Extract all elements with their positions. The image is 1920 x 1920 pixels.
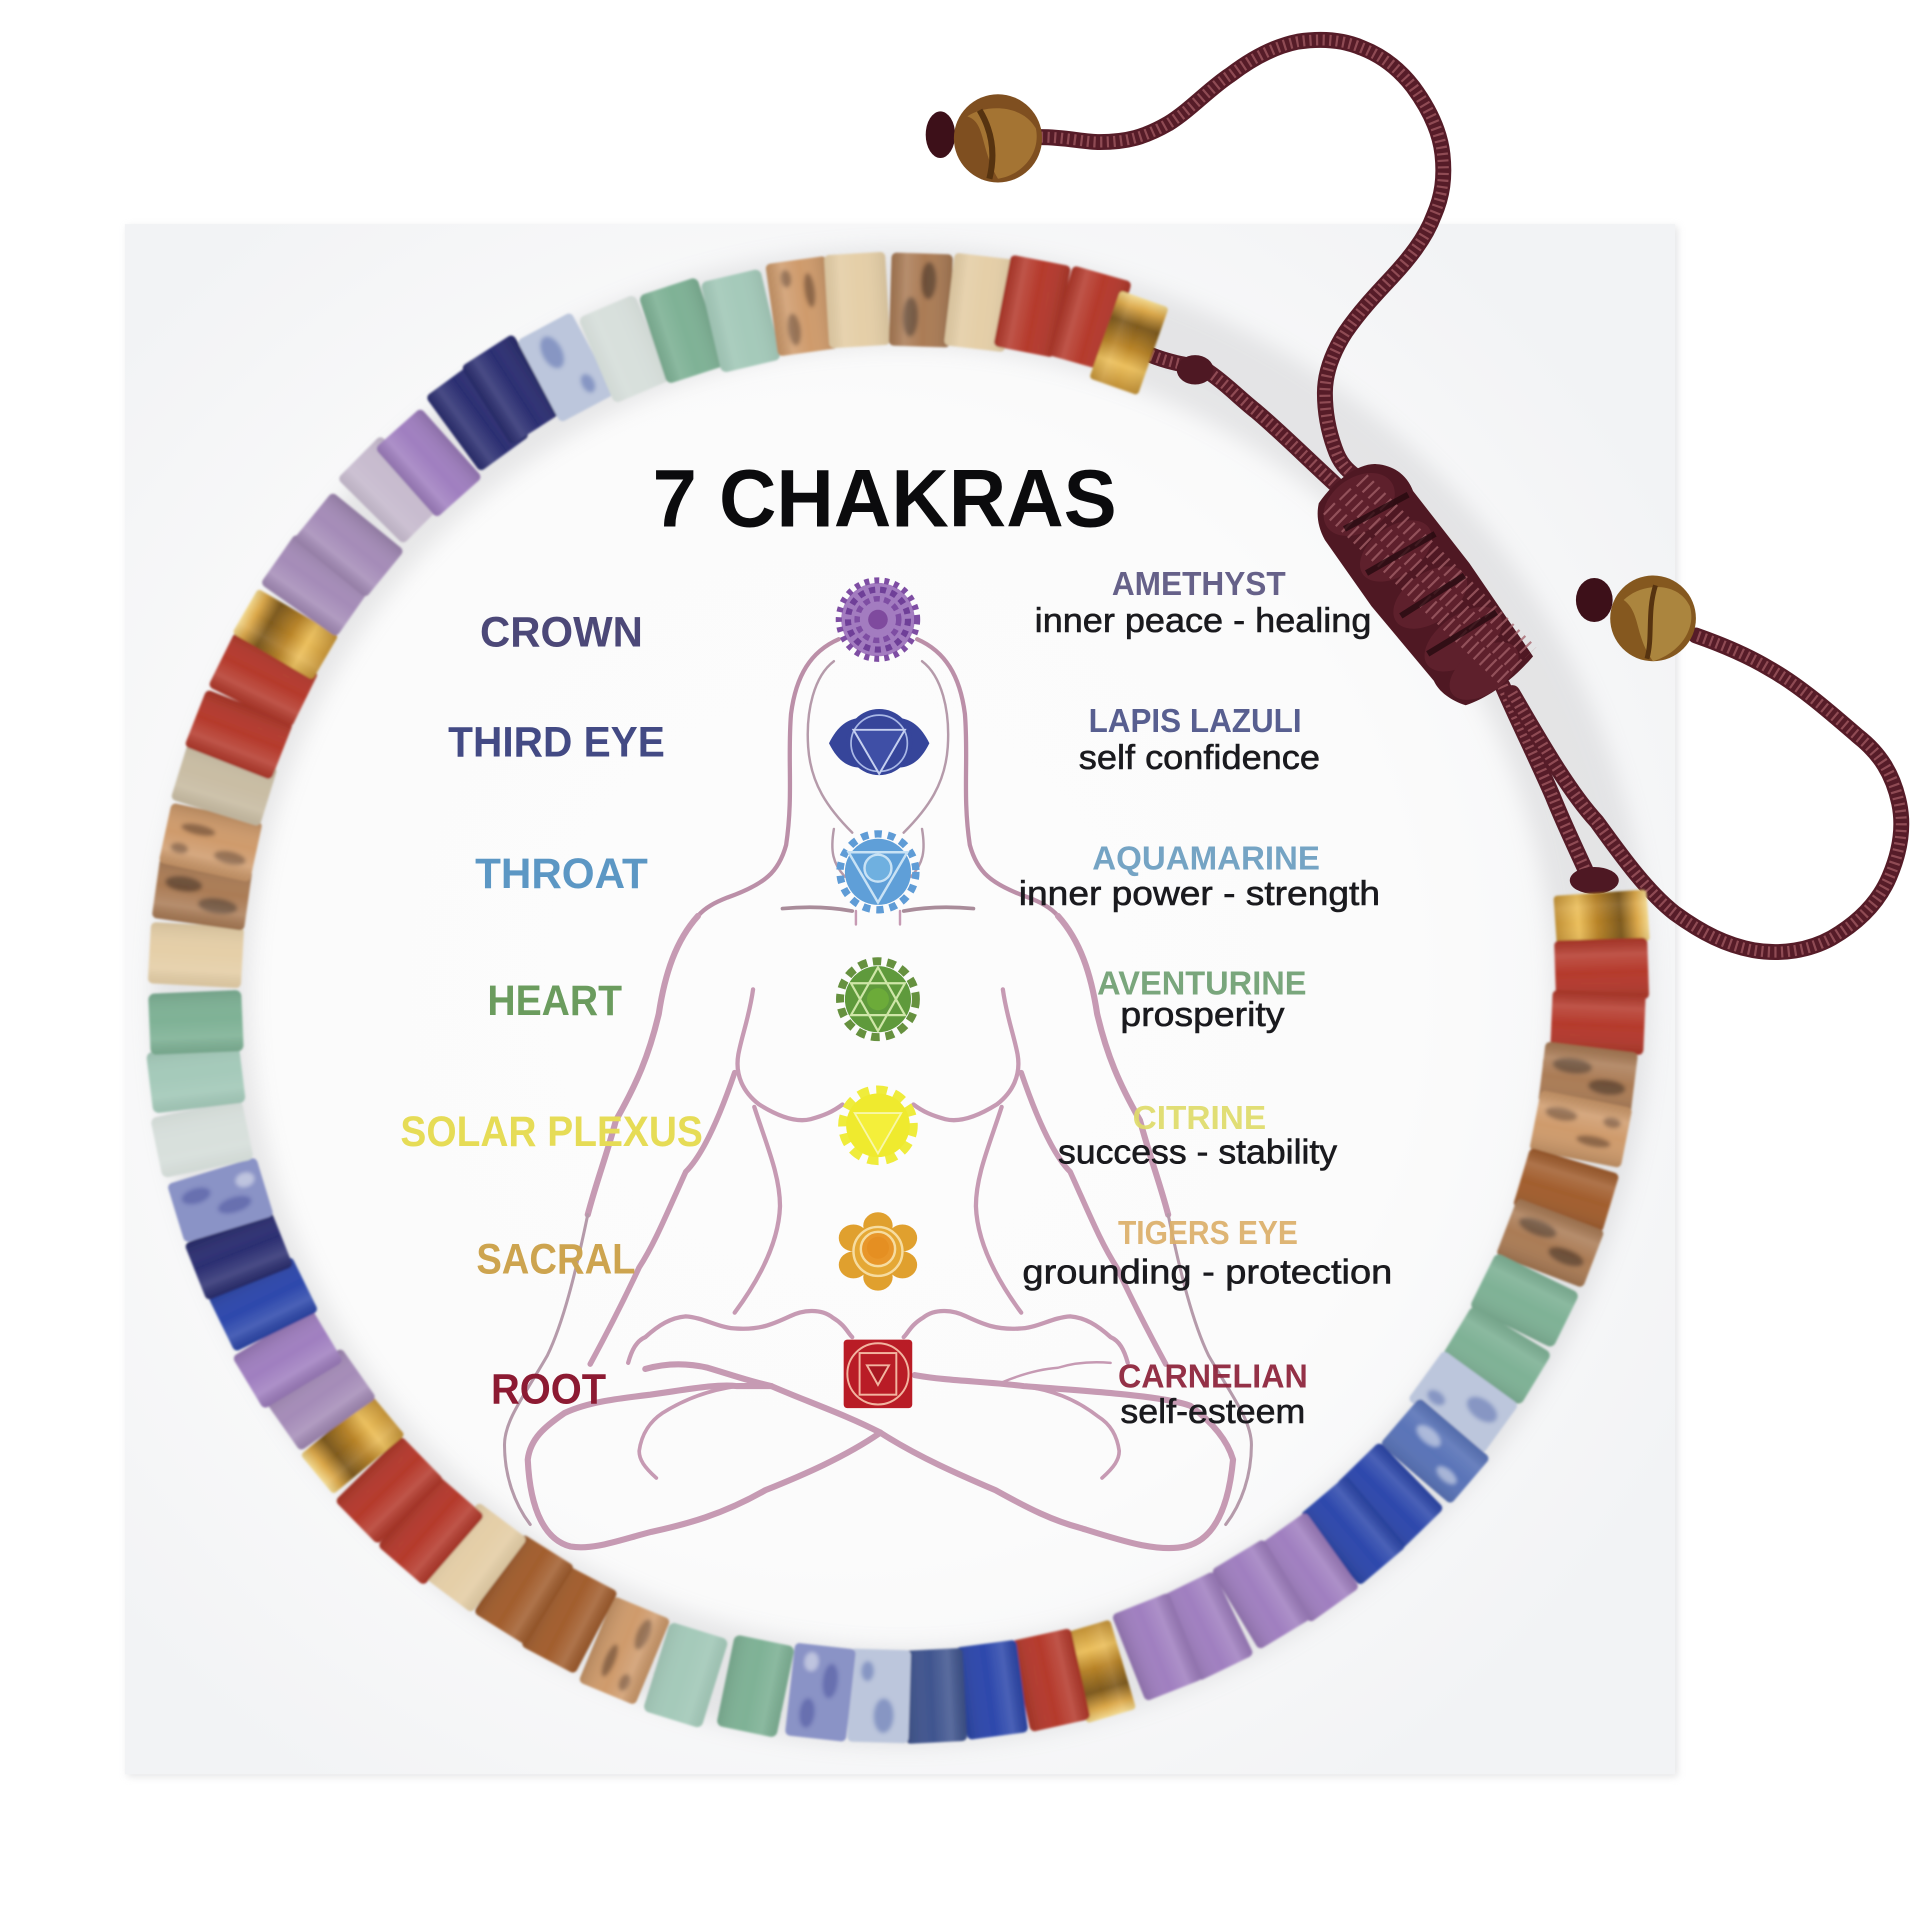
- stone: lapis lazuli: LAPIS LAZULI: [1089, 703, 1302, 740]
- stone: aventurine: [1097, 965, 1307, 1034]
- beads: picture jasper and tigers eye: [1496, 1041, 1638, 1288]
- beads: left amethyst and lapis: [150, 1099, 376, 1451]
- stone: aquamarine: AQUAMARINE: [1092, 840, 1320, 877]
- label: third eye: THIRD EYE: [448, 719, 665, 767]
- beads: top jasper, red and gold: [765, 252, 1169, 395]
- beads: top sodalite and aventurine: [517, 269, 781, 423]
- stones and meanings: [1019, 566, 1392, 1431]
- beads: lower right amethyst: [1112, 1512, 1360, 1701]
- cord: strand from knot to right clasp: [1502, 686, 1592, 884]
- icon: third eye chakra: [829, 709, 929, 775]
- adjustable cord: [1041, 40, 1901, 952]
- backing card: [125, 224, 1678, 1777]
- icon: solar plexus chakra: [842, 1090, 913, 1161]
- crossed legs: [528, 1362, 1233, 1548]
- chakra names: [400, 609, 703, 1413]
- beads: upper left amethyst and lapis: [260, 334, 563, 637]
- beads: bottom jasper and browns: [423, 1502, 671, 1705]
- stone: amethyst: AMETHYST: [1112, 566, 1286, 603]
- title: 7 CHAKRAS: [653, 454, 1117, 545]
- stone: amethyst: [1035, 566, 1371, 640]
- beads: upper left jasper and red: [152, 589, 338, 931]
- stone: carnelian: self-esteem: [1120, 1393, 1305, 1431]
- stone: tigers eye: [1022, 1215, 1392, 1291]
- meditating figure outline: [504, 639, 1251, 1548]
- cord: loop to second tiger eye bead: [1512, 636, 1901, 952]
- icon: root chakra: [844, 1340, 912, 1408]
- beads: right aventurine: [1441, 1252, 1580, 1406]
- icon: throat chakra: [840, 834, 916, 910]
- stone: citrine: [1058, 1100, 1338, 1171]
- beads: lower left red and gold: [300, 1395, 485, 1586]
- label: crown: CROWN: [480, 609, 643, 657]
- stone: aquamarine: inner power - strength: [1019, 875, 1380, 913]
- stone: aquamarine: [1019, 840, 1380, 913]
- beads: bottom sodalite and aventurine: [643, 1622, 911, 1743]
- cord: upper strand to tiger eye bead: [1041, 40, 1443, 476]
- label: root: ROOT: [491, 1365, 606, 1413]
- icon: sacral chakra: [839, 1212, 917, 1291]
- icon: heart chakra: [840, 961, 916, 1037]
- cord: small knot at clasp: [1177, 355, 1213, 384]
- stone: carnelian: CARNELIAN: [1118, 1358, 1308, 1395]
- label: solar plexus: SOLAR PLEXUS: [400, 1108, 703, 1156]
- stone: amethyst: inner peace - healing: [1035, 602, 1371, 640]
- bracelet beads: [146, 252, 1650, 1744]
- stone: tigers eye: TIGERS EYE: [1118, 1215, 1298, 1252]
- stone: carnelian: [1118, 1358, 1308, 1431]
- stone: tigers eye: grounding - protection: [1022, 1253, 1392, 1291]
- stone: lapis lazuli: self confidence: [1079, 739, 1320, 777]
- beads: right sodalite and lapis: [1300, 1350, 1519, 1586]
- cord: strand from top clasp to knot: [1151, 355, 1335, 484]
- label: sacral: SACRAL: [476, 1235, 636, 1283]
- bracelet soft shadow: [201, 296, 1602, 1697]
- label: throat: THROAT: [475, 850, 648, 898]
- cord: small knot at right clasp: [1570, 867, 1619, 894]
- label: heart: HEART: [487, 977, 622, 1025]
- beads: left aventurine and cream: [146, 922, 246, 1114]
- icon: crown chakra: [839, 580, 917, 659]
- tiger eye bead: top: [926, 94, 1042, 182]
- stone: lapis lazuli: [1079, 703, 1320, 777]
- cord: sliding macrame knot: [1312, 460, 1533, 712]
- beads: bottom gold, red and lapis: [901, 1620, 1136, 1744]
- stone: citrine: CITRINE: [1133, 1100, 1266, 1137]
- stone: citrine: success - stability: [1058, 1133, 1338, 1171]
- tiger eye bead: right: [1576, 576, 1696, 661]
- stone: aventurine: prosperity: [1120, 996, 1285, 1034]
- stone: aventurine: AVENTURINE: [1097, 965, 1307, 1002]
- beads: right clasp and red jasper: [1550, 889, 1650, 1055]
